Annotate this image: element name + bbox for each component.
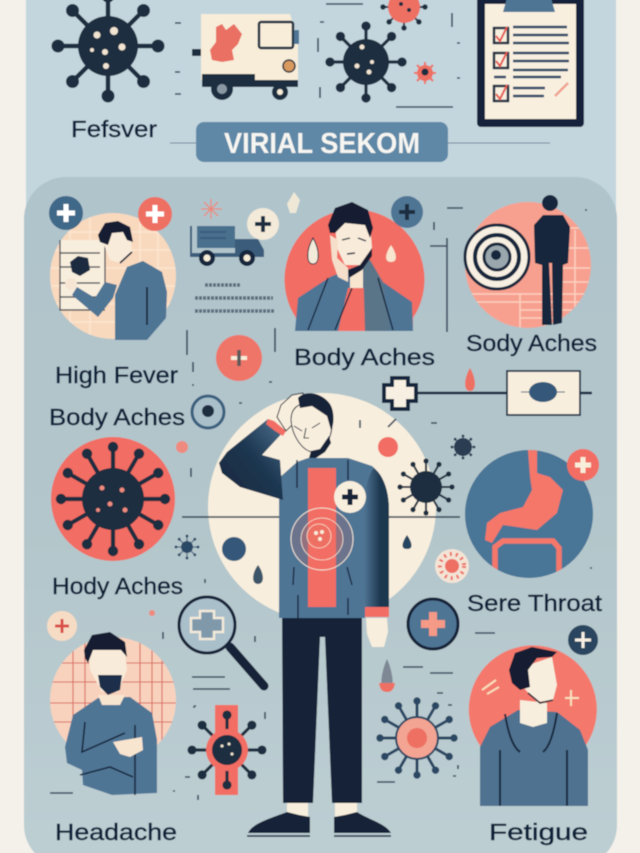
hair [84, 632, 127, 663]
soles [247, 835, 391, 837]
jaw line [528, 693, 553, 703]
raised cuff [266, 419, 286, 436]
eyes [294, 423, 320, 438]
torso [115, 261, 167, 340]
panel: header background [26, 0, 616, 295]
text: body aches left: Body Aches [49, 404, 185, 430]
hand [65, 278, 77, 290]
icon: orange virus [376, 697, 458, 779]
right cuff [365, 607, 389, 617]
icon: ringed virus badge [192, 396, 224, 428]
icon: red plus circle [216, 335, 262, 381]
text: blurred caption [195, 285, 275, 311]
icon: grey drop [253, 565, 263, 584]
icon: dark cell [451, 435, 475, 459]
icon: connector with box [384, 368, 592, 415]
icon: large virus top left [52, 0, 164, 102]
icon: bandaged virus [187, 705, 267, 795]
ankles [287, 803, 357, 817]
face [291, 403, 332, 452]
icon: leaf [287, 192, 300, 213]
title banner: VIRIAL SEKOM [224, 128, 420, 160]
icon: person holding face medallion [284, 202, 424, 331]
text: body aches upper: Body Aches [294, 344, 435, 370]
face [523, 657, 557, 702]
face [335, 223, 372, 265]
symptom target [291, 508, 353, 570]
small red mark [149, 610, 155, 616]
raised arm [219, 419, 285, 500]
icon: fatigued man medallion [469, 645, 597, 806]
hand [113, 737, 143, 757]
icon: bearded man medallion [45, 632, 180, 795]
icon: dark virus near circle edge [397, 458, 455, 516]
panel: symptoms [24, 177, 617, 853]
icon: red plus left [47, 611, 77, 641]
shirt [308, 468, 336, 607]
jacket seams [293, 460, 352, 618]
icon: red virus top [380, 0, 428, 31]
text: fetigue: Fetigue [489, 819, 588, 845]
rash blob [70, 256, 90, 276]
central figure: man with headache [219, 393, 391, 836]
torso [65, 697, 157, 795]
icon: blood drop [379, 659, 395, 692]
icon: dark star [175, 535, 199, 559]
icon: small red virus [414, 62, 436, 84]
icon: plus badge cream [247, 208, 279, 240]
central illustration: beige circle [208, 393, 436, 621]
beard [348, 248, 372, 278]
hair [98, 221, 133, 245]
hair [509, 647, 557, 690]
icon: stomach medallion [465, 450, 593, 578]
icon: plus badge stomach [567, 449, 599, 481]
icon: small water drop [402, 535, 412, 549]
seam [120, 252, 147, 325]
icon: delivery truck [192, 14, 299, 100]
icon: plus badge red [138, 197, 172, 231]
icon: medium virus [325, 21, 407, 103]
sweat drops [308, 238, 396, 264]
text: hody aches: Hody Aches [52, 573, 183, 599]
collar and seams [500, 713, 567, 806]
hair [328, 202, 373, 238]
collar [363, 260, 390, 331]
seams [308, 238, 393, 330]
body [295, 262, 413, 331]
sparks [482, 680, 579, 706]
small scattered marks [50, 4, 592, 800]
icon: plus badge blue [49, 196, 83, 230]
arm seams [80, 722, 135, 795]
face [104, 228, 132, 263]
face [88, 650, 127, 692]
text: headache: Headache [55, 819, 177, 845]
trousers [282, 608, 362, 803]
hair [298, 393, 334, 430]
icon: plus badge dark [568, 625, 598, 655]
icon: spark [201, 199, 222, 219]
icon: plus badge navy [391, 196, 423, 228]
icon: clipboard checklist [477, 0, 584, 127]
arm [72, 282, 117, 317]
right hand [366, 618, 388, 647]
raised hand [277, 393, 305, 431]
target [465, 225, 529, 289]
shirt [338, 288, 367, 331]
shoes [248, 812, 391, 833]
jacket [279, 458, 389, 618]
neck [520, 700, 547, 727]
silhouette [534, 195, 570, 325]
icon: red blob [378, 437, 398, 457]
body [480, 710, 588, 806]
icon: large red virus medallion [51, 437, 175, 561]
icon: small truck [190, 226, 264, 266]
beard [98, 675, 122, 695]
icon: navy circle [222, 537, 246, 561]
text: sere throat: Sere Throat [467, 590, 603, 616]
text: header label: Fefsver [71, 116, 157, 142]
text: sody aches: Sody Aches [466, 330, 597, 356]
plus badge [334, 481, 366, 513]
beard [309, 436, 331, 458]
icon: target and silhouette [465, 195, 591, 330]
icon: person at wall medallion [50, 210, 180, 340]
wall panel [60, 240, 105, 310]
title banner [170, 122, 550, 162]
text: high fever: High Fever [55, 362, 178, 388]
icon: medical circle [408, 599, 458, 649]
icon: small red blob left [176, 441, 188, 453]
plus sign [342, 489, 358, 505]
neck [98, 695, 125, 705]
icon: pale virus right [435, 549, 469, 583]
icon: magnifying glass [179, 597, 264, 686]
neck [350, 264, 363, 288]
hand [330, 235, 348, 282]
axis line [182, 516, 460, 518]
sleeve shading [364, 468, 389, 607]
